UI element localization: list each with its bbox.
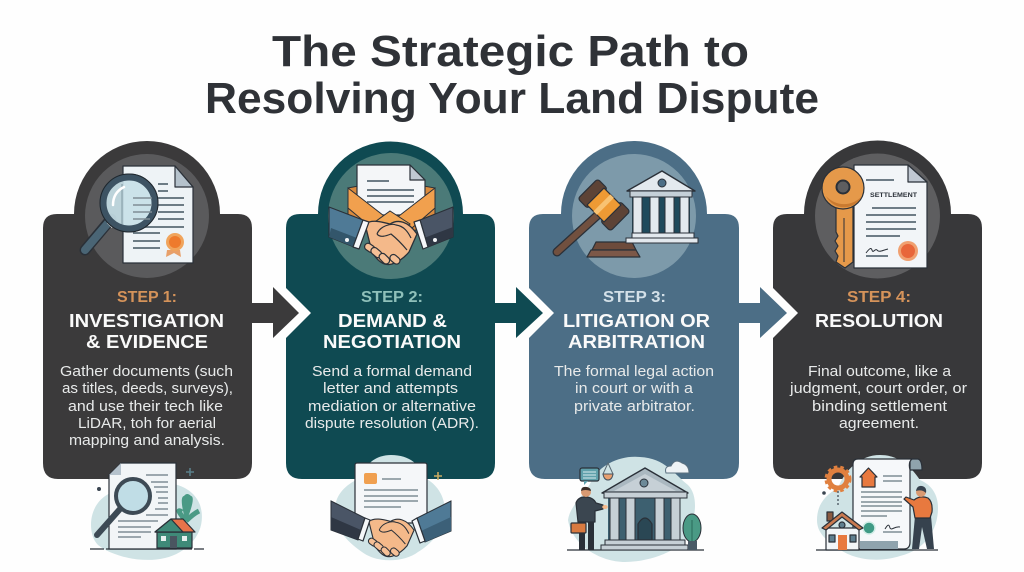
description [305, 364, 479, 432]
icon: key and settlement: SETTLEMENT [870, 192, 918, 199]
description: binding settlement [812, 399, 947, 415]
heading: INVESTIGATION [69, 310, 224, 331]
arrow: step 2 to step 3 [495, 287, 554, 338]
description: Final outcome, like a [808, 364, 952, 380]
description: LiDAR, toh for aerial [78, 416, 216, 432]
icon: scroll, home and person [816, 455, 938, 560]
panel: step 3 litigation or arbitration [529, 141, 739, 562]
description: mediation or alternative [308, 399, 476, 415]
description: letter and attempts [323, 381, 458, 397]
description: Gather documents (such [60, 364, 233, 380]
description: Send a formal demand [312, 364, 472, 380]
description: mapping and analysis. [69, 433, 225, 449]
arrow: step 1 to step 2 [252, 287, 311, 338]
icon: agreement and handshake [331, 455, 451, 560]
card shape [43, 141, 252, 479]
description: in court or with a [575, 381, 694, 397]
description [60, 364, 233, 449]
description: The formal legal action [554, 364, 714, 380]
step label: STEP 3: [603, 289, 666, 306]
step label: STEP 1: [117, 289, 177, 306]
description: dispute resolution (ADR). [305, 416, 479, 432]
description [789, 364, 967, 432]
step label: STEP 4: [847, 289, 911, 306]
card shape [529, 141, 739, 479]
description: and use their tech like [68, 399, 223, 415]
icon: gavel and courthouse [557, 154, 698, 278]
title [205, 27, 819, 123]
description: agreement. [839, 416, 919, 432]
arrow: step 3 to step 4 [739, 287, 798, 338]
title: Resolving Your Land Dispute [205, 74, 819, 123]
panel: step 2 demand and negotiation [286, 142, 495, 560]
icon: magnifying glass on document [85, 154, 209, 278]
icon: key and settlement [815, 154, 940, 278]
icon: lawyer at courthouse [567, 457, 704, 562]
step label: STEP 2: [361, 289, 423, 306]
heading [563, 310, 710, 352]
heading: LITIGATION OR [563, 310, 710, 331]
heading: ARBITRATION [568, 331, 705, 352]
description: as titles, deeds, surveys), [62, 381, 233, 397]
card shape [286, 142, 495, 479]
card shape [773, 140, 982, 479]
icon: letter and handshake [328, 153, 454, 279]
heading [69, 310, 224, 352]
title: The Strategic Path to [272, 27, 749, 76]
icon: document search and house [90, 463, 204, 560]
panel: step 1 investigation and evidence [43, 141, 252, 560]
description: judgment, court order, or [789, 381, 967, 397]
heading: NEGOTIATION [323, 331, 461, 352]
description [554, 364, 714, 415]
heading [323, 310, 461, 352]
description: private arbitrator. [574, 399, 695, 415]
heading: DEMAND & [338, 310, 447, 331]
heading: RESOLUTION [815, 310, 943, 331]
panel: step 4 resolution [773, 140, 982, 560]
heading: & EVIDENCE [86, 331, 208, 352]
